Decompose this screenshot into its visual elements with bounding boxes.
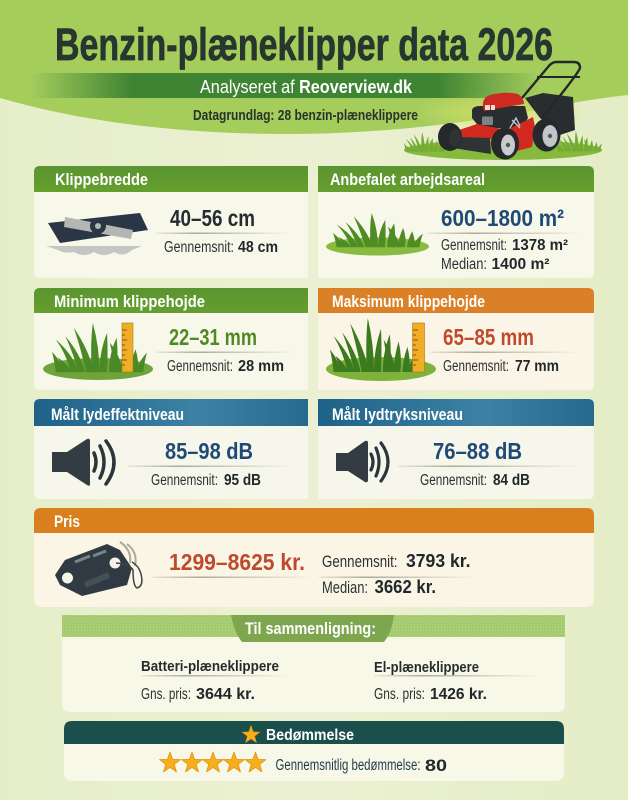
header: Anbefalet arbejdsareal: Anbefalet arbejdsareal: [330, 171, 485, 189]
value: price range: 1299–8625 kr.: [169, 549, 305, 575]
value: sound pressure range: 76–88 dB: [433, 438, 522, 464]
average rating value: 80: [425, 756, 447, 775]
header: Målt lydtryksniveau: Målt lydtryksniveau: [332, 406, 463, 424]
comparison: electric mowers: 1426 kr.: [430, 686, 487, 703]
header: Maksimum klippehojde: Maksimum klippehojde: [332, 293, 485, 311]
value: cutting width range: 40–56 cm: [170, 205, 255, 231]
icon: lawn mower: [404, 62, 602, 160]
header: Minimum klippehojde: [34, 288, 308, 313]
panel: Maksimum klippehojde: [318, 288, 594, 390]
average: cutting width: Gennemsnit:: [164, 239, 234, 256]
icon: five stars: [160, 752, 266, 772]
header tab: Til sammenligning: [231, 615, 394, 642]
median: price: 3662 kr.: [374, 577, 436, 597]
value: minimum height range: 22–31 mm: [169, 324, 257, 350]
average: maximum height: 77 mm: [515, 358, 559, 375]
icon: grass patch: [326, 213, 429, 256]
comparison: battery mowers: 3644 kr.: [196, 686, 255, 703]
comparison: electric mowers: [374, 659, 540, 703]
header: Minimum klippehojde: Minimum klippehojde: [54, 293, 205, 311]
average rating label: Gennemsnitlig bedømmelse:: [276, 757, 420, 774]
average: minimum height: 28 mm: [238, 358, 284, 375]
median: area: Median:: [441, 256, 487, 273]
comparison: battery mowers: [141, 658, 288, 703]
header: Pris: Pris: [54, 513, 80, 531]
icon: short grass with ruler: [43, 323, 153, 380]
icon: price tag: [55, 542, 142, 596]
average: minimum height: Gennemsnit:: [167, 358, 233, 375]
average: sound power: Gennemsnit:: [151, 472, 218, 489]
average: area: [441, 237, 568, 254]
average: area: Gennemsnit:: [441, 237, 507, 254]
value: maximum height range: 65–85 mm: [443, 324, 534, 350]
panel: Minimum klippehojde: [34, 288, 308, 390]
average: cutting width: 48 cm: [238, 239, 278, 256]
header: Anbefalet arbejdsareal: [318, 166, 594, 192]
average: price: [322, 551, 470, 571]
average: price: 3793 kr.: [406, 551, 470, 571]
median: price: [322, 577, 436, 597]
header: Målt lydeffektniveau: [34, 399, 308, 426]
icon: tall grass with ruler: [326, 318, 436, 381]
comparison: electric mowers: El-plæneklippere: [374, 659, 479, 676]
median: area: 1400 m²: [492, 256, 550, 273]
value: area range: 600–1800 m²: [441, 205, 564, 231]
icon: mower blade: [46, 213, 148, 255]
comparison: electric mowers: Gns. pris:: [374, 686, 425, 703]
header: Målt lydeffektniveau: Målt lydeffektniveau: [51, 406, 184, 424]
comparison: battery mowers: Batteri-plæneklippere: [141, 658, 279, 675]
average: area: 1378 m²: [512, 237, 568, 254]
header banner: [0, 0, 628, 134]
median: area: [441, 256, 550, 273]
icon: speaker: [336, 441, 388, 482]
subtitle band: Analyseret af Reoverview.dk: [200, 76, 413, 97]
subtitle band: [30, 73, 540, 98]
panel: Pris: [34, 508, 594, 607]
average: sound pressure: 84 dB: [493, 472, 530, 489]
header: Bedømmelse: Bedømmelse: [266, 727, 354, 744]
panel: Målt lydeffektniveau: [34, 399, 308, 499]
header: Klippebredde: [34, 166, 308, 192]
data basis: Datagrundlag: 28 benzin-plæneklippere: [193, 107, 418, 124]
panel: Bedømmelse: [64, 721, 564, 781]
header tab: Til sammenligning: Til sammenligning:: [245, 619, 376, 638]
header: Pris: [34, 508, 594, 533]
comparison: battery mowers: Gns. pris:: [141, 686, 191, 703]
average: sound power: 95 dB: [224, 472, 261, 489]
average: price: Gennemsnit:: [322, 553, 398, 571]
panel: Klippebredde: [34, 166, 308, 278]
panel: Til sammenligning: [62, 615, 565, 712]
panel: Anbefalet arbejdsareal: [318, 166, 594, 278]
median: price: Median:: [322, 579, 368, 597]
value: sound power range: 85–98 dB: [165, 438, 253, 464]
average: maximum height: Gennemsnit:: [443, 358, 509, 375]
header: Bedømmelse: [64, 721, 564, 744]
header: Målt lydtryksniveau: [318, 399, 594, 426]
header: Klippebredde: Klippebredde: [55, 171, 148, 189]
header: Maksimum klippehojde: [318, 288, 594, 313]
panel: Målt lydtryksniveau: [318, 399, 594, 499]
average: sound pressure: Gennemsnit:: [420, 472, 487, 489]
icon: speaker: [52, 439, 114, 486]
